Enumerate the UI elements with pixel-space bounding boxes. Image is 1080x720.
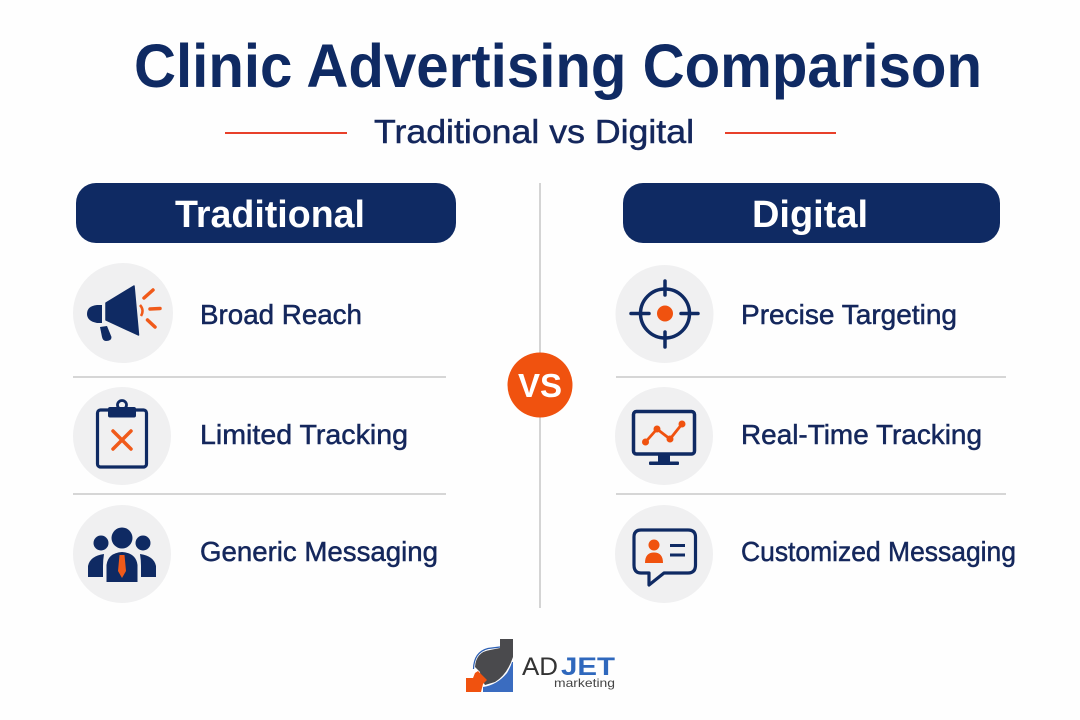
label: Limited Tracking bbox=[200, 419, 408, 450]
icon: monitor with chart bbox=[615, 387, 713, 485]
row: customized messaging bbox=[615, 505, 1016, 603]
row: real-time tracking bbox=[615, 387, 982, 485]
title: Clinic Advertising Comparison bbox=[134, 32, 982, 100]
row: generic messaging bbox=[73, 505, 438, 603]
label: Broad Reach bbox=[200, 299, 362, 330]
vs badge bbox=[508, 352, 572, 418]
logo text: JET bbox=[561, 653, 615, 681]
row: limited tracking bbox=[73, 387, 408, 485]
logo: adjet marketing bbox=[466, 639, 615, 692]
heading: digital bbox=[623, 183, 1000, 243]
panel: digital bbox=[615, 183, 1016, 603]
row: broad reach bbox=[73, 263, 362, 363]
icon: people group bbox=[73, 505, 171, 603]
heading: traditional: Traditional bbox=[175, 194, 365, 236]
logo text: marketing bbox=[554, 676, 615, 690]
icon: clipboard with x bbox=[73, 387, 171, 485]
label: Precise Targeting bbox=[741, 299, 957, 330]
vs badge: VS bbox=[518, 367, 562, 404]
heading: traditional bbox=[76, 183, 456, 243]
subtitle: Traditional vs Digital bbox=[374, 114, 694, 151]
icon: crosshair target bbox=[616, 265, 714, 363]
logo text: AD bbox=[522, 653, 558, 681]
row: precise targeting bbox=[616, 265, 957, 363]
label: Generic Messaging bbox=[200, 536, 438, 567]
icon: profile chat bubble bbox=[615, 505, 713, 603]
label: Real-Time Tracking bbox=[741, 419, 982, 450]
label: Customized Messaging bbox=[741, 536, 1016, 567]
panel: traditional bbox=[73, 183, 456, 603]
icon: megaphone bbox=[73, 263, 173, 363]
logo text bbox=[522, 653, 615, 690]
heading: digital: Digital bbox=[752, 194, 868, 236]
logo mark bbox=[466, 639, 513, 692]
center divider bbox=[539, 183, 541, 608]
